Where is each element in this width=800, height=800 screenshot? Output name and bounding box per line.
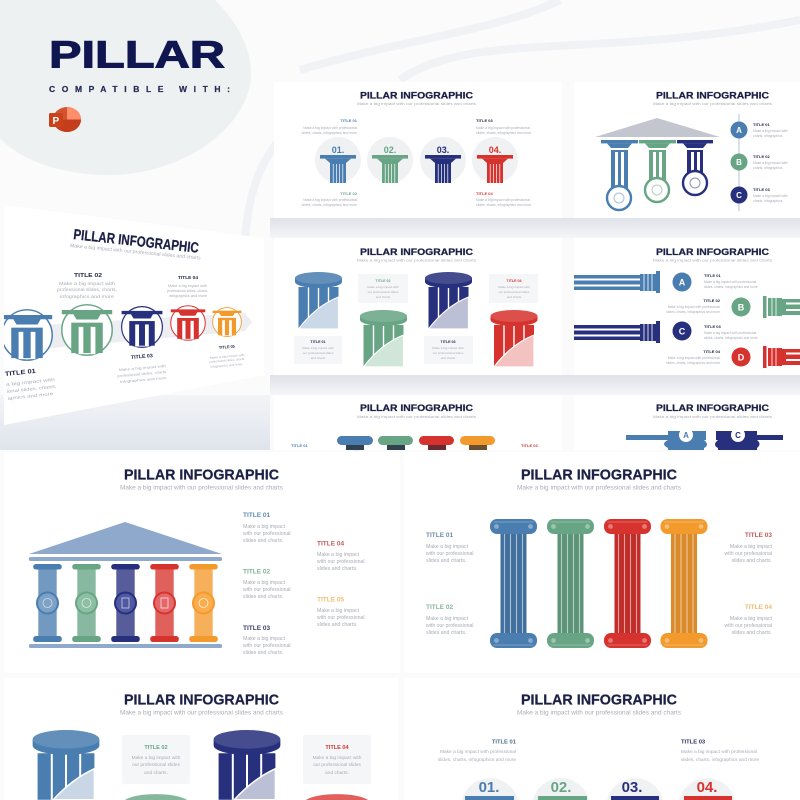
hanging pillar 3 bbox=[677, 140, 713, 195]
text: title 02: slides, charts, infographics and more bbox=[302, 203, 357, 207]
circle 01 bbox=[462, 778, 518, 800]
text: title 04: Make a big impact bbox=[730, 616, 773, 622]
subtitle: Make a big impact with our professional slides and charts bbox=[517, 710, 681, 716]
panel bbox=[274, 82, 562, 218]
text: title 03: with our professional bbox=[243, 643, 291, 649]
cylinder 4 bbox=[306, 794, 368, 800]
text: title 01 bbox=[753, 122, 788, 138]
text: title 04: Make a big impact with bbox=[168, 284, 207, 288]
box: title 02: our professional slides bbox=[132, 762, 180, 768]
panel bbox=[574, 82, 800, 218]
text: title 03: TITLE 03 bbox=[681, 740, 706, 746]
text: title 03: TITLE 03 bbox=[131, 353, 153, 361]
slide: large cylinders bbox=[4, 678, 398, 800]
text: title 03: professional slides, charts, bbox=[117, 370, 167, 378]
text: title 02 bbox=[753, 154, 788, 170]
text: title 04: with our professional bbox=[317, 559, 365, 565]
badge C: C bbox=[736, 191, 742, 200]
cylinder 3 bbox=[214, 730, 280, 800]
pillar 5 bbox=[189, 564, 218, 642]
box: title 04 bbox=[489, 274, 538, 303]
text: title 01: Make a big impact with professional bbox=[440, 749, 516, 755]
text: title 02: TITLE 02 bbox=[426, 604, 453, 611]
badge D: D bbox=[738, 352, 745, 362]
text: title 02: TITLE 02 bbox=[703, 298, 721, 303]
text: title 02: TITLE 02 bbox=[753, 154, 770, 159]
pillar 02 bbox=[62, 305, 112, 355]
pillar A: A bbox=[683, 431, 689, 440]
text: title 02 bbox=[302, 191, 358, 207]
subtitle: Make a big impact with our professional slides and charts bbox=[653, 102, 772, 106]
slide: cropped A and C pillars bbox=[626, 404, 783, 450]
text: title 01: Make a big impact with professional bbox=[303, 126, 357, 130]
panel bbox=[574, 395, 800, 450]
pillar B bbox=[763, 296, 800, 318]
text: title 01: TITLE 01 bbox=[492, 740, 517, 746]
text: title 01: TITLE 01 bbox=[426, 532, 453, 539]
badge C: C bbox=[679, 326, 686, 336]
text: title 05: professional slides, charts, bbox=[209, 357, 245, 364]
text: title 05 bbox=[208, 343, 246, 369]
panel bbox=[4, 678, 398, 800]
text: title 01: slides, charts, infographics and more bbox=[704, 285, 758, 289]
text: title 02: infographics and more bbox=[60, 294, 115, 299]
text: title 03: Make a big impact with professional bbox=[681, 749, 757, 755]
box: title 04: and charts bbox=[507, 295, 522, 299]
text: title 04: TITLE 04 bbox=[317, 540, 344, 548]
text: title 01: with our professional bbox=[243, 531, 291, 537]
text: title 02 bbox=[426, 604, 474, 636]
text: title 03: Make a big impact with bbox=[753, 194, 788, 198]
circle 03: 03. bbox=[622, 779, 642, 796]
pillar 05 bbox=[213, 308, 241, 336]
panel bbox=[404, 678, 800, 800]
heading: PILLAR INFOGRAPHIC bbox=[656, 247, 770, 257]
circles bbox=[315, 137, 518, 183]
text: title 04: slides, charts, infographics and more bbox=[476, 203, 531, 207]
text: title 02: TITLE 02 bbox=[243, 568, 270, 576]
slide subtitle: Make a big impact with our professional slides and charts bbox=[70, 243, 201, 262]
text: title 01: slides, charts, infographics and more bbox=[302, 131, 357, 135]
heading: PILLAR INFOGRAPHIC bbox=[521, 692, 677, 708]
perspective slide bbox=[0, 205, 270, 450]
background blob bbox=[0, 0, 251, 175]
cylinder 2 bbox=[125, 794, 187, 800]
text: title 01: TITLE 01 bbox=[5, 368, 37, 378]
pillar 04 bbox=[477, 145, 513, 183]
text: title 02 bbox=[666, 298, 721, 314]
badge C bbox=[730, 186, 748, 204]
text: title 03: TITLE 03 bbox=[521, 443, 538, 448]
pillar 2 bbox=[72, 564, 101, 642]
text: title 02: Make a big impact bbox=[243, 580, 286, 586]
box: title 03: our professional slides bbox=[433, 351, 464, 355]
text: title 03: charts, infographics bbox=[753, 199, 783, 203]
heading block: pillar bbox=[0, 0, 251, 175]
text: title 01 bbox=[438, 740, 517, 763]
pillar 2 bbox=[547, 519, 594, 648]
text: title 03: Make a big impact with bbox=[119, 364, 166, 372]
text: title 02: slides, charts, infographics and more bbox=[666, 310, 720, 314]
badge B: B bbox=[736, 158, 742, 167]
panel bbox=[274, 238, 562, 375]
text: title 03: slides, charts, infographics and more bbox=[476, 131, 531, 135]
badge A bbox=[730, 122, 748, 138]
text: title 03 bbox=[704, 324, 758, 340]
box: title 04: our professional slides bbox=[313, 762, 361, 768]
box: title 02 bbox=[122, 735, 190, 784]
badge B bbox=[732, 298, 750, 316]
text: title 01: TITLE 01 bbox=[291, 443, 308, 448]
text: title 01: Make a big impact bbox=[426, 544, 469, 550]
pillar 4 bbox=[150, 564, 179, 642]
pillar 03 bbox=[425, 145, 461, 183]
panel bbox=[574, 238, 800, 375]
box: title 03: and charts bbox=[441, 356, 456, 360]
grid shadow bands bbox=[270, 218, 800, 395]
heading: PILLAR INFOGRAPHIC bbox=[360, 90, 474, 100]
text: title 03: TITLE 03 bbox=[243, 625, 270, 632]
text: title 02: slides and charts. bbox=[426, 630, 466, 636]
box: title 03: TITLE 03 bbox=[441, 340, 455, 344]
text: title 01 bbox=[5, 366, 57, 401]
text: title 02 bbox=[57, 273, 117, 299]
text: title 03: slides, charts, infographics and more bbox=[681, 757, 759, 763]
text: title 02: with our professional bbox=[243, 587, 291, 593]
floor bbox=[29, 644, 222, 648]
circle 03 bbox=[607, 778, 663, 800]
text: title 05: Make a big impact bbox=[317, 608, 360, 614]
pillar 03 bbox=[122, 307, 162, 347]
text: title 01: TITLE 01 bbox=[340, 118, 358, 123]
badge A: A bbox=[679, 278, 686, 288]
text: title 03: Make a big impact bbox=[730, 544, 773, 550]
text: title 01: slides and charts. bbox=[426, 558, 466, 564]
text: title 02: slides and charts. bbox=[243, 594, 283, 600]
circle 01: 01. bbox=[479, 779, 499, 796]
pillar 3 bbox=[111, 564, 140, 642]
arrow band bbox=[40, 313, 252, 349]
text: title 01: ional slides, charts, bbox=[6, 384, 57, 394]
heading: PILLAR INFOGRAPHIC bbox=[656, 90, 770, 100]
text: title 02: professional slides, charts, bbox=[57, 287, 117, 292]
text: title 04: with our professional bbox=[724, 623, 772, 629]
heading: PILLAR INFOGRAPHIC bbox=[124, 466, 279, 484]
text: title 01: TITLE 01 bbox=[704, 273, 721, 278]
text: title 04: Make a big impact with professional bbox=[476, 198, 530, 202]
subtitle: Make a big impact with our professional slides and charts bbox=[357, 258, 476, 262]
text: title 02: charts, infographics bbox=[753, 166, 783, 170]
pillar 01: 01. bbox=[332, 145, 344, 155]
icon: PowerPoint: P bbox=[52, 116, 60, 127]
subtitle: Make a big impact with our professional slides and charts bbox=[120, 486, 283, 492]
subtitle: Make a big impact with our professional slides and charts bbox=[357, 415, 476, 419]
circle 02: 02. bbox=[551, 779, 571, 796]
pillar 03: 03. bbox=[437, 145, 449, 155]
heading: PILLAR INFOGRAPHIC bbox=[360, 247, 474, 257]
decorative ribbons background bbox=[244, 0, 800, 450]
text: title 01: a big impact with bbox=[6, 377, 56, 387]
box: title 02: and charts. bbox=[144, 770, 168, 776]
badge C bbox=[672, 322, 692, 340]
text: title 05 bbox=[317, 596, 365, 628]
pillar 04 bbox=[171, 306, 205, 340]
text: title 03: slides, charts, infographics and more bbox=[704, 336, 758, 340]
box: title 01: TITLE 01 bbox=[311, 340, 325, 344]
circle 04: 04. bbox=[697, 779, 717, 796]
subtitle: Make a big impact with our professional slides and charts bbox=[653, 415, 772, 419]
box: title 01: Make a big impact with bbox=[302, 346, 334, 350]
box: title 02: and charts bbox=[376, 295, 391, 299]
box: title 03: Make a big impact with bbox=[432, 346, 464, 350]
text: title 02: TITLE 02 bbox=[74, 273, 102, 279]
text: title 01 bbox=[302, 118, 358, 135]
text: title 04: Make a big impact with professional bbox=[668, 356, 720, 360]
cylinder 2 bbox=[360, 310, 407, 367]
text: title 03: TITLE 03 bbox=[745, 532, 772, 539]
subtitle: Make a big impact with our professional slides and charts bbox=[120, 710, 283, 716]
heading: PILLAR INFOGRAPHIC bbox=[360, 403, 474, 413]
text: title 05: slides and charts. bbox=[317, 622, 357, 628]
slide: temple with hanging pillars bbox=[574, 82, 800, 218]
slide: horizontal pillars bbox=[574, 238, 800, 375]
text: title 03 bbox=[116, 352, 168, 384]
hanging pillar 1 bbox=[601, 140, 638, 210]
text: title 01: TITLE 01 bbox=[753, 122, 770, 127]
pillar D bbox=[763, 346, 800, 368]
text: title 04: TITLE 04 bbox=[745, 604, 772, 611]
text: title 04 bbox=[167, 275, 208, 298]
cylinder 4 bbox=[490, 310, 538, 367]
pillar 1 bbox=[33, 564, 62, 642]
roof bbox=[595, 118, 720, 137]
text: title 01 bbox=[243, 512, 291, 544]
text: title 05: Make a big impact with bbox=[210, 353, 245, 360]
heading: PILLAR INFOGRAPHIC bbox=[124, 692, 279, 708]
slide: cylinders bbox=[274, 238, 562, 375]
text: title 05: TITLE 05 bbox=[219, 344, 236, 350]
cylinder 1 bbox=[295, 272, 342, 329]
text: title 03: slides and charts. bbox=[732, 558, 772, 564]
cylinder 3 bbox=[425, 272, 472, 329]
text: title 01: slides and charts. bbox=[243, 538, 283, 544]
text: title 01: with our professional bbox=[426, 551, 474, 557]
slide: circle pillars bbox=[274, 82, 562, 218]
circle 02 bbox=[533, 778, 589, 800]
slide heading: PILLAR INFOGRAPHIC bbox=[73, 227, 200, 257]
box: title 02 bbox=[358, 274, 408, 303]
text: title 02: TITLE 02 bbox=[340, 191, 358, 196]
badge B bbox=[730, 154, 748, 170]
pillar 01 bbox=[2, 310, 52, 360]
slide: temple with five pillars bbox=[4, 452, 400, 673]
subtitle: Make a big impact with our professional slides and charts bbox=[357, 102, 476, 106]
text: title 04 bbox=[476, 191, 531, 207]
text: title 03: Make a big impact bbox=[243, 636, 286, 642]
box: title 04: Make a big impact with bbox=[313, 755, 362, 761]
badge B: B bbox=[738, 302, 745, 312]
text: title 03: slides and charts. bbox=[243, 650, 283, 656]
panel bbox=[4, 452, 400, 673]
subtitle: Make a big impact with our professional slides and charts bbox=[517, 486, 681, 492]
text: title 03 bbox=[753, 187, 788, 203]
text: title 01: charts, infographics bbox=[753, 134, 783, 138]
box: title 04: TITLE 04 bbox=[507, 279, 521, 283]
heading: PILLAR INFOGRAPHIC bbox=[656, 403, 770, 413]
circle 04 bbox=[679, 778, 735, 800]
text: title 02: with our professional bbox=[426, 623, 474, 629]
box: title 04 bbox=[303, 735, 371, 784]
text: title 02: Make a big impact with professional bbox=[303, 198, 357, 202]
text: title 03: infographics and more bbox=[120, 376, 167, 384]
pillar 3 bbox=[604, 519, 651, 648]
text: title 03: TITLE 03 bbox=[753, 187, 770, 192]
text: title 04: TITLE 04 bbox=[476, 191, 493, 196]
compatible with: COMPATIBLE WITH: bbox=[49, 84, 230, 94]
text: title 01: Make a big impact bbox=[243, 524, 286, 530]
text: title 01: aphics and more bbox=[7, 391, 54, 401]
box: title 02: TITLE 02 bbox=[376, 279, 390, 283]
text: title 04: slides and charts. bbox=[317, 566, 357, 572]
panel bbox=[404, 452, 800, 673]
text: title 05: infographics and more bbox=[210, 362, 243, 369]
pillar 02: 02. bbox=[384, 145, 396, 155]
icon: PowerPoint bbox=[49, 107, 81, 132]
badge A: A bbox=[736, 126, 742, 135]
subtitle: Make a big impact with our professional slides and charts bbox=[653, 258, 772, 262]
text: title 04: slides and charts. bbox=[732, 630, 772, 636]
text: title 03: Make a big impact with professional bbox=[704, 331, 756, 335]
text: title 03: TITLE 03 bbox=[476, 118, 493, 123]
text: title 05: TITLE 05 bbox=[317, 596, 344, 604]
timeline line bbox=[738, 114, 740, 211]
text: title 03: TITLE 03 bbox=[704, 324, 721, 329]
text: title 01: TITLE 01 bbox=[243, 512, 270, 519]
text: title 04: infographics and more bbox=[169, 294, 207, 298]
slide: cropped capitals bbox=[291, 395, 538, 450]
box: title 01: our professional slides bbox=[303, 351, 334, 355]
text: title 01 bbox=[426, 532, 474, 564]
pillar 02 bbox=[372, 145, 408, 183]
pillar 04: 04. bbox=[489, 145, 501, 155]
text: title 03 bbox=[681, 740, 759, 763]
text: title 01: slides, charts, infographics and more bbox=[438, 757, 516, 763]
box: title 02: TITLE 02 bbox=[144, 745, 168, 751]
box: title 01: and charts bbox=[311, 356, 326, 360]
title: PILLAR: PILLAR bbox=[49, 34, 225, 76]
text: title 04: slides, charts, infographics and more bbox=[666, 361, 720, 365]
badge D bbox=[732, 348, 750, 366]
text: title 02: Make a big impact with bbox=[753, 161, 788, 165]
box: title 04: TITLE 04 bbox=[325, 745, 350, 751]
box: title 02: our professional slides bbox=[368, 290, 399, 294]
beam bbox=[29, 557, 222, 561]
text: title 03 bbox=[476, 118, 531, 135]
pillar 01 bbox=[320, 145, 356, 183]
heading: PILLAR INFOGRAPHIC bbox=[521, 466, 677, 484]
text: title 02: Make a big impact bbox=[426, 616, 469, 622]
roof bbox=[29, 522, 222, 554]
capitals bbox=[337, 436, 495, 450]
text: title 01 bbox=[704, 273, 758, 289]
text: title 03 bbox=[243, 625, 291, 656]
text: title 02 bbox=[243, 568, 291, 600]
text: title 04: professional slides, charts, bbox=[167, 289, 208, 293]
panel bbox=[310, 395, 346, 447]
slide panel bbox=[4, 205, 264, 425]
text: title 04: Make a big impact bbox=[317, 552, 360, 558]
box: title 02: Make a big impact with bbox=[132, 755, 181, 761]
cylinder 1 bbox=[33, 730, 99, 800]
text: title 04 bbox=[317, 540, 365, 572]
text: title 02: Make a big impact with bbox=[59, 281, 116, 286]
box: title 04: our professional slides bbox=[499, 290, 530, 294]
text: title 03 bbox=[724, 532, 773, 564]
slide shadow band bbox=[0, 395, 270, 450]
text: title 03: with our professional bbox=[724, 551, 772, 557]
pillar C bbox=[574, 321, 660, 343]
slide: numbered circles bbox=[404, 678, 800, 800]
pillar C: C bbox=[735, 431, 741, 440]
box: title 03 bbox=[424, 336, 473, 364]
badge A bbox=[672, 272, 692, 292]
text: title 04: TITLE 04 bbox=[703, 349, 721, 354]
pillar C bbox=[715, 431, 783, 450]
hanging pillar 2 bbox=[639, 140, 676, 202]
text: title 02: Make a big impact with professional bbox=[668, 305, 720, 309]
text: title 01: Make a big impact with professional bbox=[704, 280, 756, 284]
box: title 04: Make a big impact with bbox=[498, 285, 530, 289]
slide: fluted pillars bbox=[404, 452, 800, 673]
pillar 1 bbox=[490, 519, 537, 648]
text: title 04: TITLE 04 bbox=[178, 275, 199, 280]
text: title 04 bbox=[724, 604, 773, 636]
pillar A bbox=[626, 431, 707, 450]
box: title 02: Make a big impact with bbox=[367, 285, 399, 289]
text: title 03: Make a big impact with professional bbox=[476, 126, 530, 130]
text: title 05: with our professional bbox=[317, 615, 365, 621]
pillar 4 bbox=[660, 519, 708, 648]
box: title 04: and charts. bbox=[325, 770, 349, 776]
text: title 01: Make a big impact with bbox=[753, 129, 788, 133]
pillar A bbox=[574, 271, 660, 293]
text: title 04 bbox=[666, 349, 721, 365]
box: title 01 bbox=[294, 336, 342, 364]
